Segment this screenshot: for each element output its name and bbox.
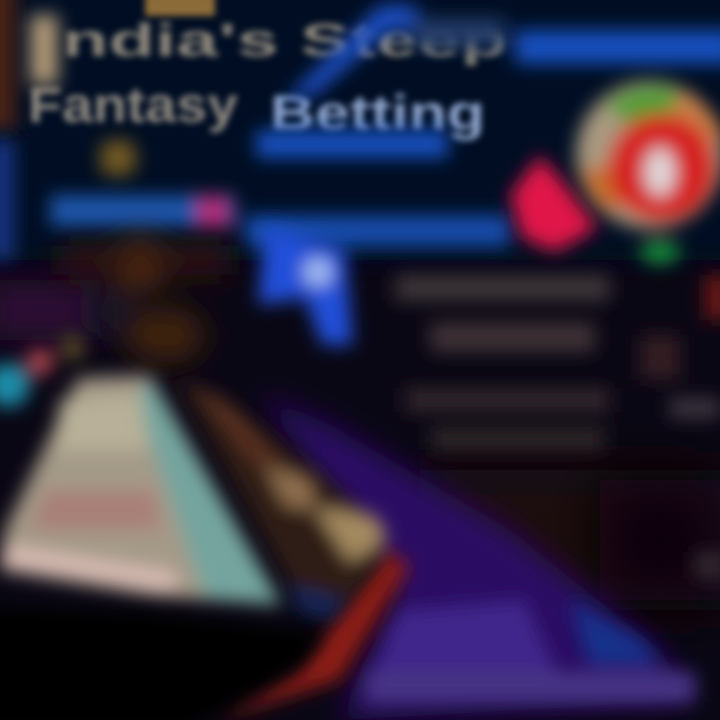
- purple floor highlight: [365, 600, 695, 702]
- table rail: [175, 375, 388, 620]
- title: ndia's Steep: [62, 14, 507, 66]
- table base shadow: [0, 605, 325, 720]
- icon: chips: [0, 336, 84, 407]
- blue title accent: [256, 5, 720, 158]
- betting table: [0, 375, 282, 605]
- icon: roulette wheel: [576, 81, 720, 320]
- title initial: [30, 15, 136, 176]
- purple floor: [260, 395, 690, 720]
- brown figure: [60, 238, 230, 363]
- icon: heart badge: [510, 155, 598, 252]
- icon: blue cards: [258, 225, 353, 345]
- title: Betting: [270, 85, 485, 141]
- title: Fantasy: [28, 77, 238, 133]
- red edge: [215, 550, 410, 720]
- banner: [50, 195, 510, 247]
- title: [28, 0, 507, 141]
- text block: [395, 275, 720, 578]
